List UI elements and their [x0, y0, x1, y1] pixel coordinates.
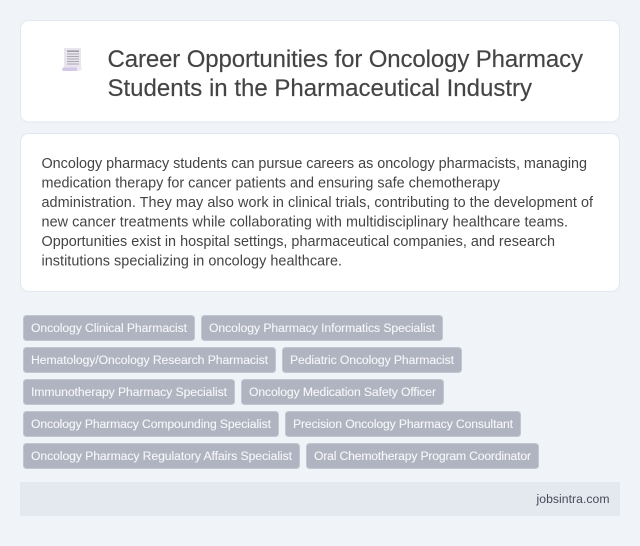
tag: Hematology/Oncology Research Pharmacist [31, 353, 269, 367]
text block: description: Oncology pharmacy students can pursue careers as oncology pharmacists, managing [42, 156, 587, 172]
icon: document scroll [62, 48, 82, 71]
tag: Oncology Pharmacy Informatics Specialist [209, 321, 436, 335]
panel: career tags [24, 316, 538, 468]
tag: Oncology Medication Safety Officer [249, 385, 436, 399]
tag: Oncology Clinical Pharmacist [31, 321, 188, 335]
tag: Immunotherapy Pharmacy Specialist [31, 385, 228, 399]
text block: description: institutions specializing in oncology healthcare. [42, 254, 342, 270]
tag [286, 412, 520, 436]
tag [282, 348, 462, 372]
tag: Oral Chemotherapy Program Coordinator [314, 449, 531, 463]
tag [242, 380, 444, 404]
title: Career Opportunities for Oncology Pharmacy [108, 46, 583, 73]
text block: description [42, 156, 594, 270]
tag: Pediatric Oncology Pharmacist [290, 353, 455, 367]
tag [24, 316, 194, 340]
tag [202, 316, 442, 340]
tag [24, 444, 300, 468]
title: Students in the Pharmaceutical Industry [108, 75, 532, 102]
tag: Oncology Pharmacy Compounding Specialist [31, 417, 272, 431]
tag [306, 444, 538, 468]
footer [20, 482, 620, 516]
text block: description: Opportunities exist in hospital settings, pharmaceutical companies, and research [42, 234, 555, 250]
text block: description: medication therapy for cancer patients and ensuring safe chemotherapy [42, 176, 501, 192]
tag: Oncology Pharmacy Regulatory Affairs Specialist [31, 449, 293, 463]
footer: jobsintra.com [536, 492, 610, 506]
text block: description: administration. They may also work in clinical trials, contributing to the development of [42, 195, 594, 211]
text block: description: new cancer treatments while collaborating with multidisciplinary healthcare teams. [42, 214, 568, 230]
panel: description [20, 134, 620, 292]
title [108, 46, 583, 102]
panel: header [20, 20, 620, 122]
tag [24, 348, 276, 372]
tag [24, 380, 234, 404]
tag [24, 412, 278, 436]
tag: Precision Oncology Pharmacy Consultant [293, 417, 514, 431]
